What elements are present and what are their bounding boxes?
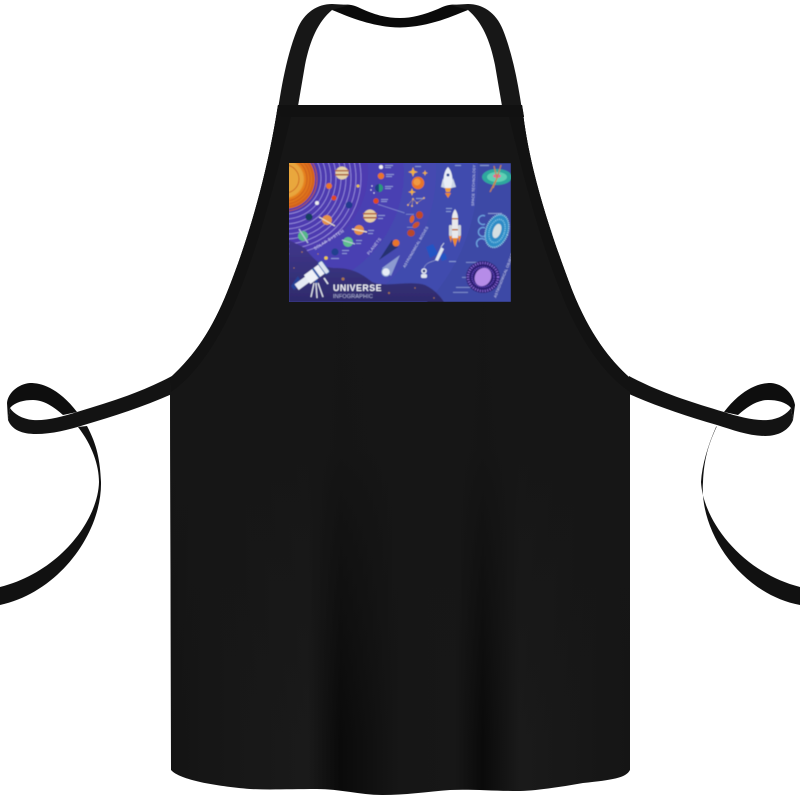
sun: [289, 163, 318, 212]
icon: satellite: [426, 243, 447, 261]
icon: white comet: [382, 255, 400, 276]
heading: solar system: SOLAR SYSTEM: [313, 228, 345, 251]
icon: telescope: [291, 260, 330, 298]
icon: purple galaxy: [466, 261, 500, 293]
icon: spiral galaxy: [484, 213, 510, 249]
left apron tie: [0, 376, 172, 605]
solar system orbits: [289, 163, 362, 255]
apron body: [170, 105, 630, 795]
heading: space technology: SPACE TECHNOLOGY: [471, 164, 476, 206]
heading: astronomical objects: ASTRONOMICAL OBJECTS: [493, 250, 516, 298]
dark foreground hill: [289, 240, 444, 302]
heading: astronomical bodies: ASTRONOMICAL BODIES: [402, 225, 430, 268]
solar system planets: [298, 166, 360, 243]
subtitle: infographic: INFOGRAPHIC: [333, 294, 373, 300]
icon: white shuttle rocket: [441, 167, 456, 198]
icon: orange comet: [379, 240, 400, 260]
heading: planets: PLANETS: [366, 236, 382, 256]
icon: galaxy diagrams: [477, 216, 485, 247]
icon: wormhole: [482, 165, 512, 192]
panel background bands: [289, 163, 511, 302]
decorative stars: [293, 251, 435, 299]
icon: launch rocket: [449, 209, 461, 247]
planets column: [324, 165, 384, 260]
printed universe infographic panel: [289, 163, 511, 302]
icon: asteroids: [407, 211, 423, 236]
right apron tie: [629, 376, 800, 605]
neck strap: [275, 4, 525, 132]
label marks: [331, 165, 502, 293]
icon: constellation: [407, 197, 425, 207]
title: universe: UNIVERSE: [333, 283, 382, 293]
icon: stars and orange planet: [408, 167, 428, 196]
icon: astronaut: [421, 260, 436, 278]
